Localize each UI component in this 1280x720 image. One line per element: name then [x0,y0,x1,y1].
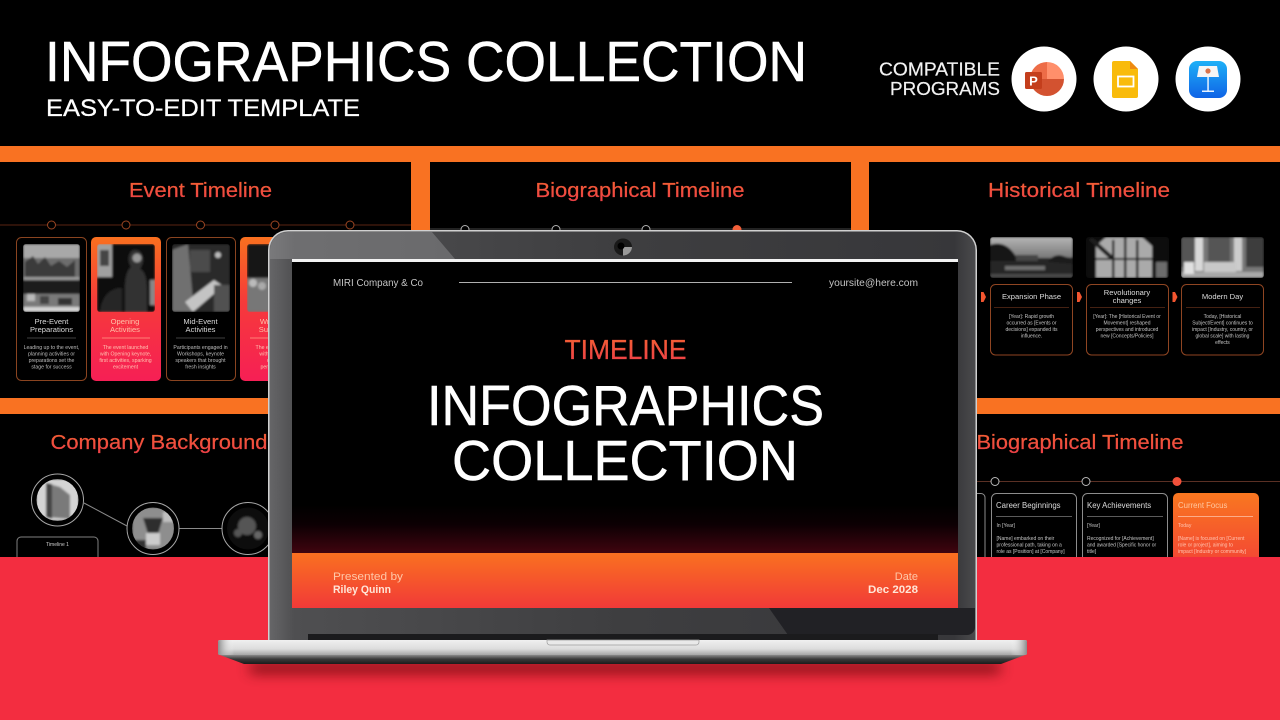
card: Opening Activities: excitement [113,364,139,370]
connector lines [84,503,222,528]
card: Career Beginnings [991,493,1077,557]
screen header: rule [459,282,792,283]
card: Revolutionary changes: [Year]: The [Historical Event or [1093,314,1161,320]
background: orange band [0,146,1280,557]
timeline markers [430,225,851,234]
card: Opening Activities: Activities [110,325,140,334]
screen title: INFOGRAPHICS [427,374,824,438]
webcam [614,238,632,256]
laptop base [218,640,1027,664]
panel: Biographical Timeline (top) [430,162,851,398]
card: Timeline 1: Timeline 1 [46,542,69,548]
icon: Keynote [1176,46,1240,112]
card: Modern Day: global scale] with lasting [1196,334,1250,340]
card: Expansion Phase [990,284,1072,355]
icon: PowerPoint: P [1029,74,1038,88]
lid [268,230,977,640]
card: Career Beginnings: role as [Position] at [Company] [996,549,1065,555]
card: Career Beginnings: professional path, taking on a [996,542,1062,548]
card: Current Focus: role or project], aiming to [1178,542,1233,548]
card: Current Focus: impact [Industry or community] [1178,549,1247,555]
laptop shadow [250,664,1000,672]
screen footer bar [292,553,958,608]
screen title [427,374,824,493]
icon: Google Slides [1094,46,1158,112]
card: Pre-Event Preparations: stage for success [31,364,72,370]
card: Key Achievements: and awarded [Specific honor or [1087,542,1157,548]
photo: lake landscape [990,237,1073,278]
panel: Company Background [0,414,268,557]
card: Wrap-Up Summary: The event ended [256,345,295,351]
card: Wrap-Up Summary: closing [267,358,283,364]
card: Opening Activities: first activities, sparking [99,358,152,364]
card: Key Achievements: Key Achievements [1087,501,1151,510]
card: Current Focus: Current Focus [1178,501,1227,510]
panel: Event Timeline [0,162,411,398]
card: Career Beginnings: In [Year] [996,523,1016,529]
card: Key Achievements: title] [1087,549,1097,555]
screen [292,259,958,608]
card: Mid-Event Activities: Participants engaged in [173,345,228,351]
screen header: company: MIRI Company & Co [333,277,423,289]
photo: modern interior [1181,237,1264,278]
card: Expansion Phase: [Year]: Rapid growth [1009,314,1054,320]
card: Wrap-Up Summary: with a closing [259,352,291,358]
card: Current Focus [1173,493,1259,557]
card: Expansion Phase: occurred as [Events or [1006,320,1057,326]
card: Opening Activities: Opening [111,317,139,326]
card: Opening Activities: The event launched [103,345,148,351]
card: Revolutionary changes: Movement] reshaped [1104,320,1151,326]
card: Pre-Event Preparations: Leading up to the event, [24,345,79,351]
icon: PowerPoint [1012,46,1076,112]
card: Wrap-Up Summary [240,237,273,381]
circle photo: tower [32,474,84,526]
screen title: COLLECTION [452,429,798,493]
card: Pre-Event Preparations: Preparations [30,325,73,334]
background: red floor [0,557,1280,720]
card: Mid-Event Activities: Activities [186,325,216,334]
circle photo: crowd [222,502,274,554]
card: Mid-Event Activities [166,238,236,380]
card: Mid-Event Activities: speakers that brought [175,358,226,364]
card: Mid-Event Activities: fresh insights [185,364,216,370]
screen footer bar: Date [895,571,918,583]
card: Pre-Event Preparations: planning activities or [28,352,75,358]
card: Pre-Event Preparations: Pre-Event [35,317,69,326]
timeline connector [0,221,411,229]
panel: Historical Timeline [869,162,1280,398]
screen footer bar: Presented by [333,571,404,583]
background: black header area [0,0,1280,146]
card: Modern Day: Modern Day [1202,292,1243,301]
card: Mid-Event Activities: Workshops, keynote [177,352,224,358]
card: Revolutionary changes: Revolutionary [1104,288,1150,297]
card: Modern Day: Subject/Event] continues to [1192,320,1253,326]
screen footer bar: Dec 2028 [868,584,918,596]
card: Current Focus: Today [1178,523,1192,529]
card: Revolutionary changes [1086,284,1168,355]
heading: Biographical Timeline [536,180,744,202]
card: Modern Day: impact [Industry, country, or [1192,327,1253,333]
card: Timeline 1 [17,537,98,557]
heading: Historical Timeline [988,180,1170,202]
card: Key Achievements [1082,493,1168,557]
screen header: email: yoursite@here.com [829,277,918,289]
laptop [218,230,1027,664]
screen footer bar: Riley Quinn [333,584,391,596]
timeline markers [869,477,1280,486]
card: Modern Day: effects [1215,340,1230,346]
card: Career Beginnings: Career Beginnings [996,501,1061,510]
subtitle: EASY-TO-EDIT TEMPLATE [46,95,360,122]
card: Career Beginnings: [Name] embarked on their [996,536,1055,542]
circle photo: trophy [127,502,179,554]
card: Mid-Event Activities: Mid-Event [183,317,218,326]
compatible programs label: PROGRAMS [890,78,1000,99]
panel: Biographical Timeline (bottom) [977,414,1280,557]
card: earlier milestone (partly hidden) [977,493,986,557]
card: Modern Day [1182,284,1264,355]
photo: gothic window [1086,237,1169,278]
heading: Biographical Timeline [976,432,1184,454]
card: Key Achievements: Recognized for [Achievement] [1087,536,1154,542]
card: Pre-Event Preparations [16,238,86,380]
card: Opening Activities: with Opening keynote, [100,352,151,358]
main title: INFOGRAPHICS COLLECTION [45,30,807,94]
connector arrows [981,292,1178,302]
heading: Event Timeline [129,180,272,202]
card: Revolutionary changes: new [Concepts/Policies] [1100,334,1154,340]
card: Expansion Phase: Expansion Phase [1002,292,1061,301]
card: Modern Day: Today, [Historical [1204,314,1241,320]
card: Wrap-Up Summary: Wrap-Up [260,317,290,326]
card: Expansion Phase: influence. [1021,334,1042,340]
card: Expansion Phase: decisions] expanded its [1006,327,1058,333]
heading: Company Background [50,432,268,454]
compatible programs label [879,58,1000,99]
compatible programs label: COMPATIBLE [879,58,1000,80]
screen glow [292,505,958,553]
card: Pre-Event Preparations: preparations set the [29,358,75,364]
card: Key Achievements: [Year] [1087,523,1100,529]
card: Wrap-Up Summary: performance [260,364,290,370]
card: Opening Activities [91,237,161,381]
card: Current Focus: [Name] is focused on [Current [1178,536,1245,542]
card: Revolutionary changes: perspectives and introduced [1096,327,1158,333]
screen label: timeline: TIMELINE [564,334,686,365]
card: Wrap-Up Summary: Summary [259,325,291,334]
card: Revolutionary changes: changes [1113,296,1142,305]
